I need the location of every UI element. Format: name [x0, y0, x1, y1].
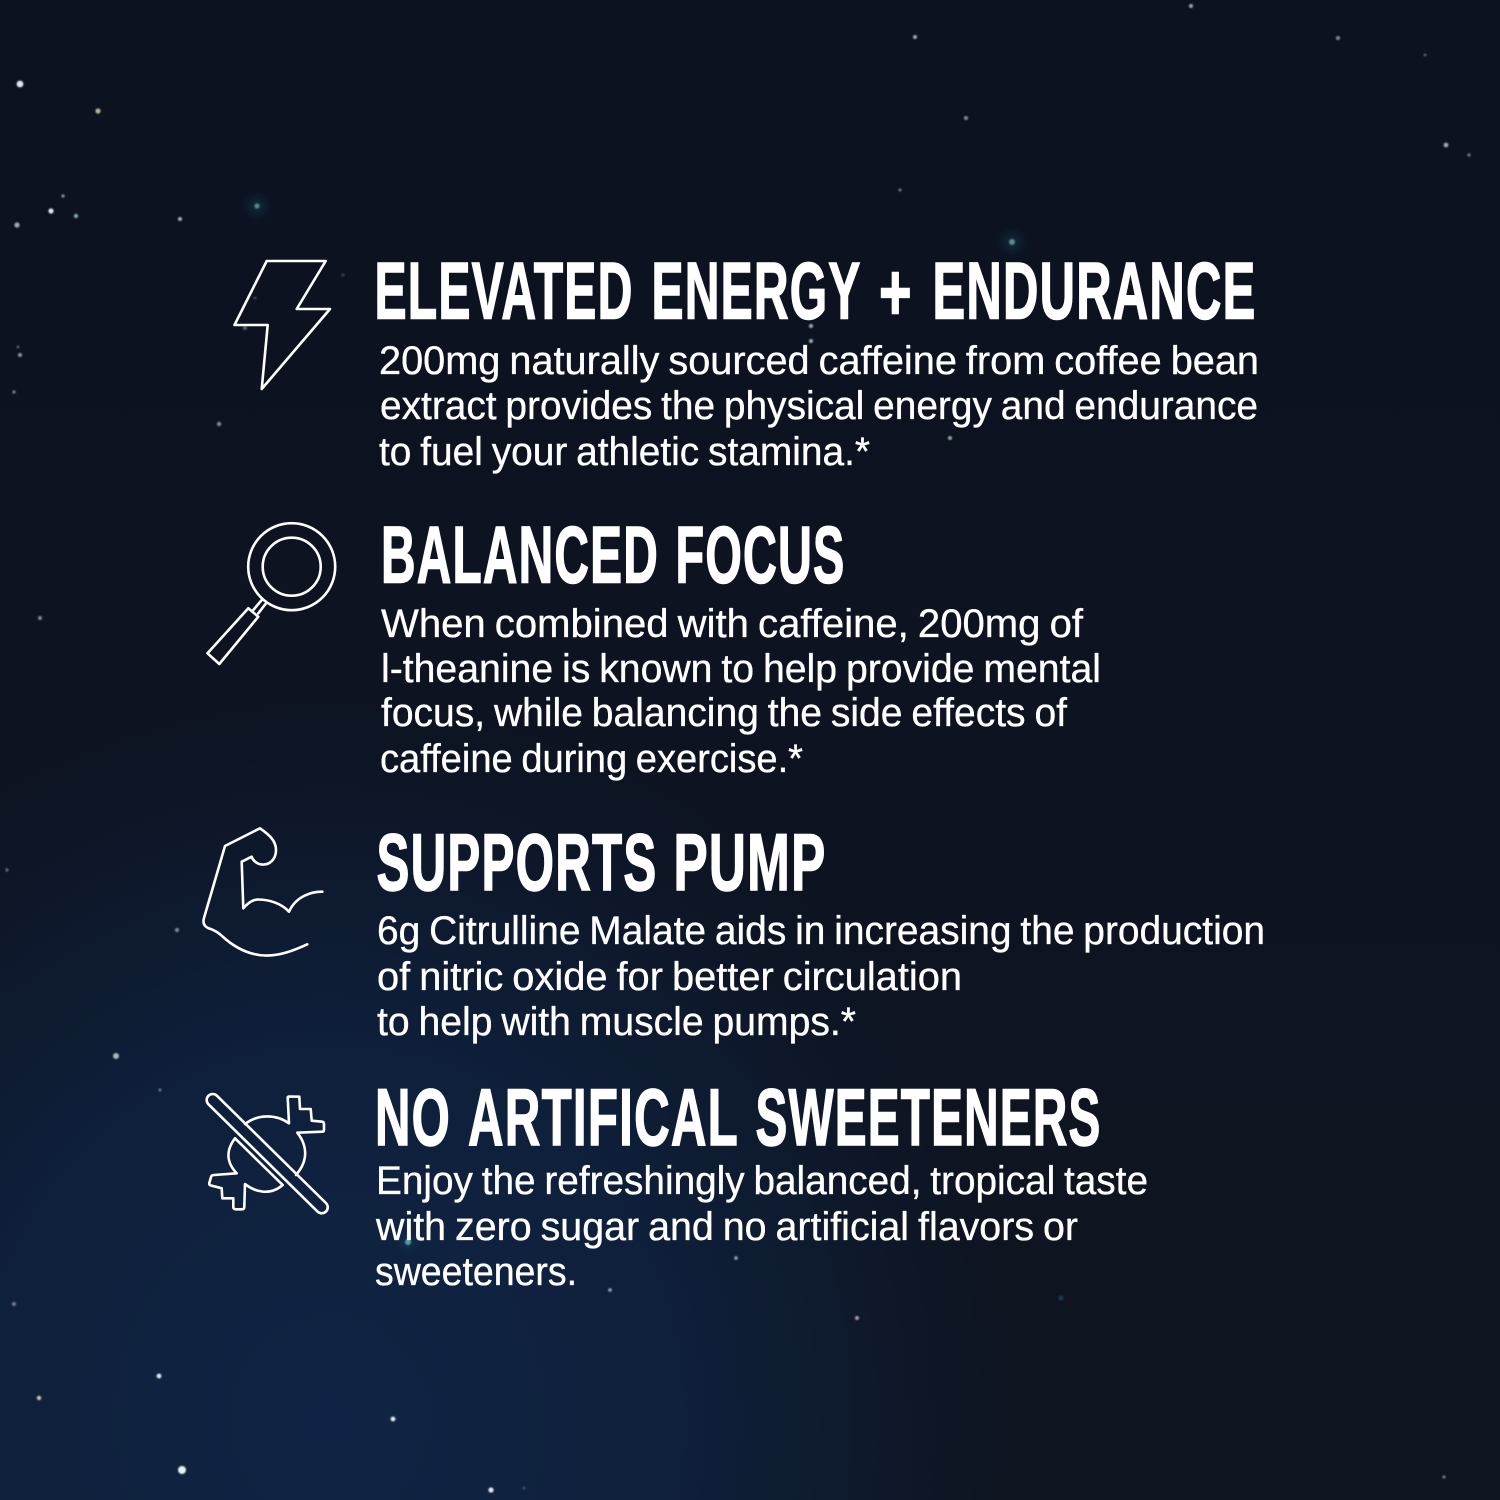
heading: balanced focus: BALANCED [381, 510, 659, 600]
text block: citrulline description: 6g Citrulline Malate aids in increasing the production [377, 909, 1265, 953]
heading: no artifical sweeteners: ARTIFICAL [468, 1073, 739, 1163]
text block: taste description: sweeteners. [375, 1250, 577, 1294]
heading: no artifical sweeteners: SWEETENERS [756, 1073, 1102, 1163]
text block: caffeine description: 200mg naturally sourced caffeine from coffee bean [379, 339, 1259, 383]
text block: l-theanine description: When combined with caffeine, 200mg of [381, 602, 1084, 646]
text block: caffeine description: to fuel your athletic stamina.* [379, 430, 870, 474]
icon: magnifying glass [208, 523, 335, 664]
text block: citrulline description [377, 909, 1265, 1044]
heading: elevated energy + endurance [374, 247, 1256, 338]
heading: elevated energy + endurance: ENDURANCE [932, 247, 1256, 337]
icon: flexed arm [203, 828, 322, 956]
text block: l-theanine description: caffeine during exercise.* [380, 737, 803, 781]
text block: taste description: Enjoy the refreshingly balanced, tropical taste [376, 1159, 1148, 1203]
text block: l-theanine description: focus, while balancing the side effects of [381, 691, 1068, 735]
text block: taste description [375, 1159, 1148, 1294]
text block: citrulline description: to help with muscle pumps.* [377, 1000, 856, 1044]
heading: elevated energy + endurance: ENERGY [652, 247, 862, 337]
text block: caffeine description [379, 339, 1259, 474]
text block: citrulline description: of nitric oxide for better circulation [377, 955, 962, 999]
icon: crossed-out candy [207, 1094, 328, 1213]
panel: supports pump [203, 818, 1265, 1044]
heading: elevated energy + endurance: ELEVATED [374, 247, 634, 337]
icon: lightning bolt [234, 261, 330, 389]
panel: elevated energy [234, 247, 1259, 474]
heading: supports pump: SUPPORTS [376, 818, 658, 908]
panel: balanced focus [208, 510, 1101, 781]
heading: balanced focus: FOCUS [676, 510, 846, 600]
panel: no artificial sweeteners [207, 1073, 1148, 1294]
heading: no artifical sweeteners: NO [375, 1073, 451, 1163]
heading: elevated energy + endurance: + [879, 248, 913, 338]
text block: taste description: with zero sugar and no artificial flavors or [375, 1205, 1078, 1249]
text block: l-theanine description [380, 602, 1101, 781]
heading: no artifical sweeteners [375, 1073, 1102, 1163]
text block: l-theanine description: l-theanine is known to help provide mental [381, 647, 1101, 691]
heading: supports pump: PUMP [674, 818, 826, 908]
text block: caffeine description: extract provides the physical energy and endurance [380, 384, 1258, 428]
